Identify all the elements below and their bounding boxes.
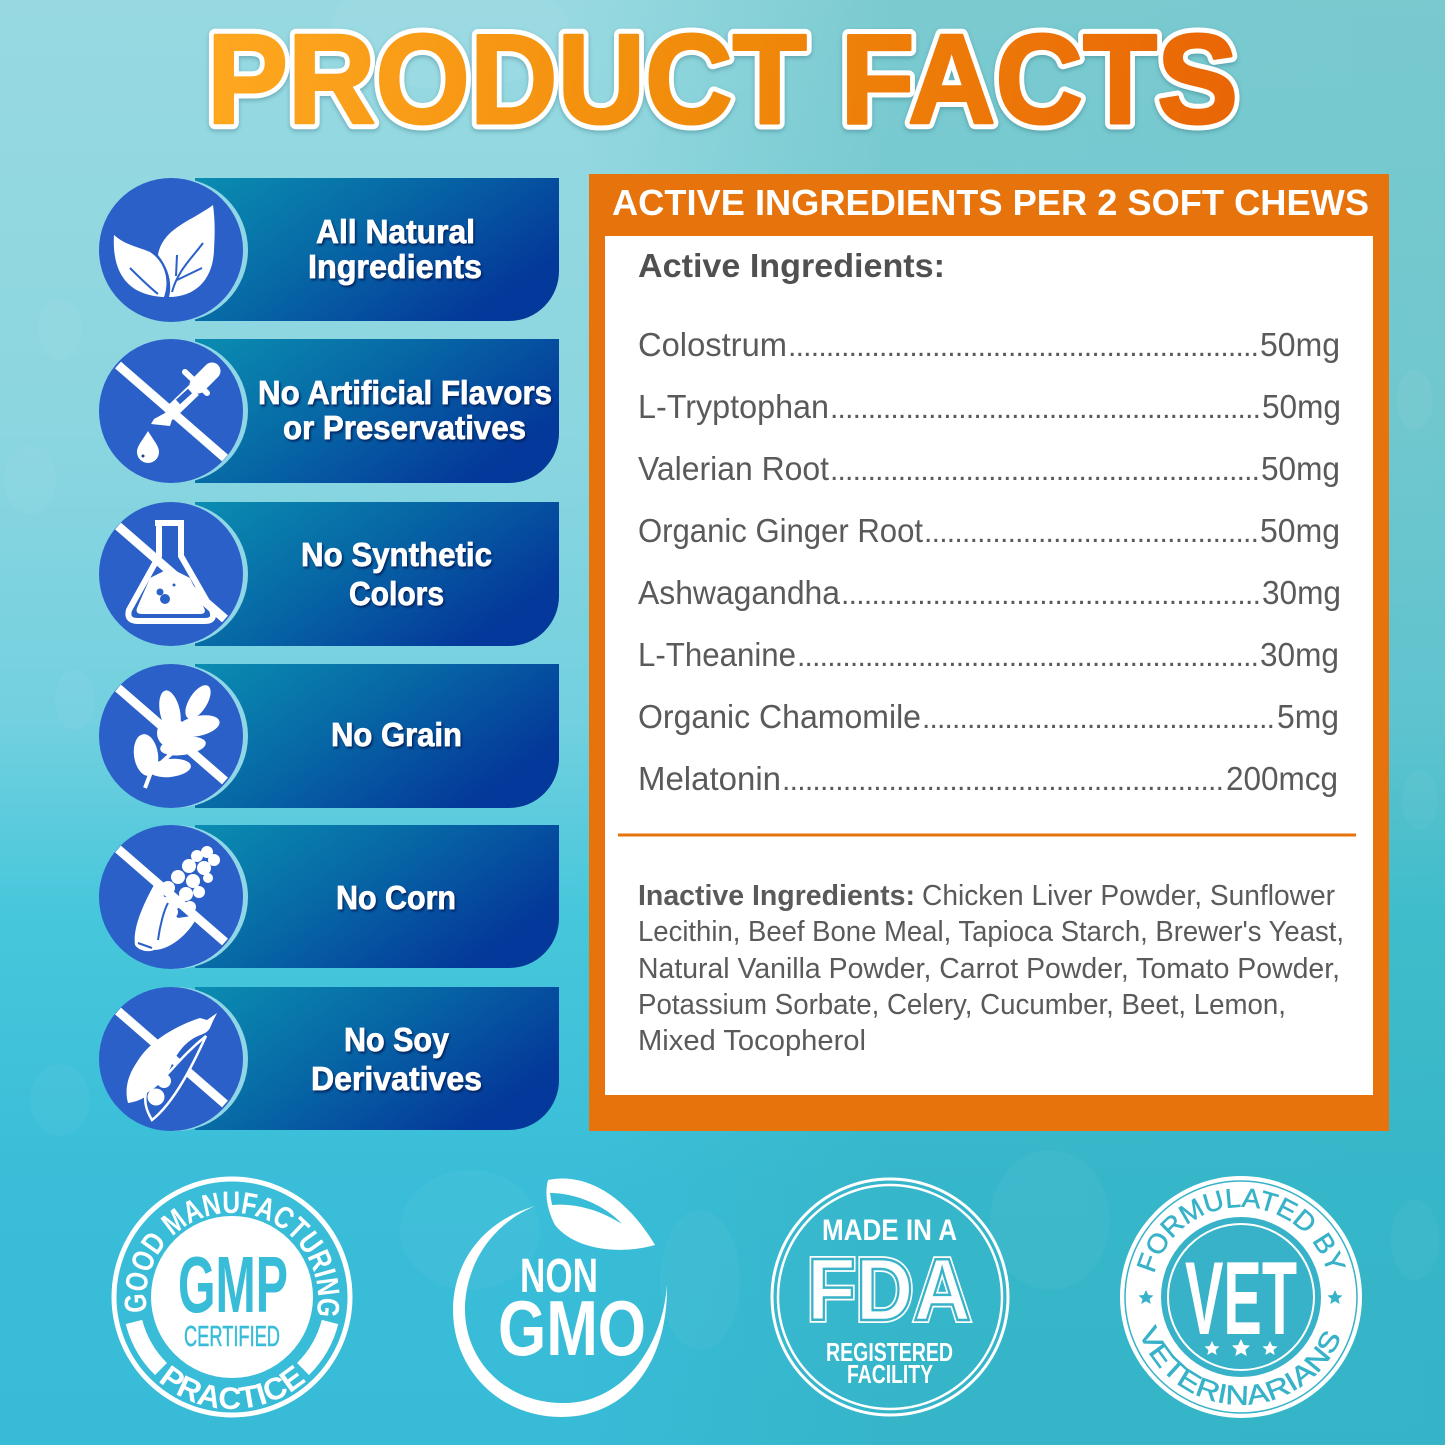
label: All Natural — [316, 213, 475, 250]
label: Derivatives — [311, 1060, 482, 1097]
ingredient: colostrum: .............................................................. — [788, 330, 1259, 363]
label: No Corn — [336, 879, 456, 916]
ingredient: l-theanine: 30mg — [1260, 636, 1339, 673]
ingredient: valerian root: 50mg — [1261, 450, 1340, 487]
label: or Preservatives — [283, 409, 526, 446]
banner: no corn — [99, 825, 559, 969]
icon: leaves — [114, 205, 215, 297]
inactive ingredients text: Natural Vanilla Powder, Carrot Powder, Tomato Powder, — [638, 953, 1340, 985]
panel: active ingredients — [589, 174, 1389, 1131]
ingredient: ashwagandha — [638, 574, 1341, 611]
banner: no soy — [99, 987, 559, 1131]
badge: formulated by veterinarians: VETERINARIANS — [1142, 1324, 1340, 1405]
badge: formulated by veterinarians — [1120, 1176, 1362, 1418]
banner: all natural ingredients — [99, 178, 559, 322]
badge: GMP certified: GMP — [178, 1240, 288, 1329]
badge: GMP certified: PRACTICE — [159, 1364, 306, 1410]
label: No Artificial Flavors — [258, 374, 552, 411]
badge: non GMO: GMO — [498, 1284, 646, 1372]
ingredient: l-theanine: L-Theanine — [638, 636, 796, 673]
ingredient: organic ginger root — [638, 512, 1340, 549]
ingredient: organic chamomile: Organic Chamomile — [638, 698, 921, 735]
badge: FDA registered: REGISTERED — [826, 1337, 953, 1367]
icon: dropper — [118, 365, 225, 463]
ingredient: organic ginger root: 50mg — [1260, 512, 1340, 549]
badge: GMP certified: GOOD MANUFACTURING — [124, 1192, 340, 1316]
ingredient: colostrum — [638, 326, 1340, 363]
inactive ingredients text: Potassium Sorbate, Celery, Cucumber, Beet, Lemon, — [638, 989, 1286, 1021]
icon: grain — [118, 681, 225, 788]
label — [308, 213, 482, 285]
badge: FDA registered: FDA — [807, 1240, 971, 1339]
banner: no grain — [99, 664, 559, 808]
badge: non GMO — [453, 1178, 667, 1417]
ingredient: organic ginger root: ............................................ — [924, 516, 1259, 549]
label — [301, 536, 492, 612]
banner: no artificial flavors — [99, 339, 559, 483]
ingredient: ashwagandha: Ashwagandha — [638, 574, 841, 611]
ingredient: colostrum: 50mg — [1260, 326, 1340, 363]
badge: FDA registered: MADE IN A — [822, 1214, 957, 1247]
badge: formulated by veterinarians: VET — [1185, 1241, 1297, 1357]
badge: formulated by veterinarians: FORMULATED BY — [1136, 1188, 1346, 1272]
ingredient: valerian root: Valerian Root — [638, 450, 829, 487]
ingredient: l-theanine: ............................................................. — [797, 640, 1259, 673]
ingredient: l-tryptophan: 50mg — [1262, 388, 1341, 425]
label — [311, 1021, 482, 1097]
ingredient: l-tryptophan: L-Tryptophan — [638, 388, 829, 425]
ingredient: organic chamomile: 5mg — [1277, 698, 1339, 735]
label: No Grain — [331, 716, 462, 753]
active ingredients heading: Active Ingredients: — [638, 247, 945, 284]
ingredient: melatonin: Melatonin — [638, 760, 781, 797]
label: No Synthetic — [301, 536, 492, 573]
badge: FDA registered — [772, 1179, 1008, 1415]
ingredient: organic ginger root: Organic Ginger Root — [638, 512, 923, 549]
badge: FDA registered: FDA — [807, 1240, 971, 1339]
icon: corn — [118, 846, 225, 951]
ingredient: l-theanine — [638, 636, 1339, 673]
ingredient: ashwagandha: ....................................................... — [841, 578, 1261, 611]
icon: flask — [118, 523, 225, 621]
ingredient: l-tryptophan: ......................................................... — [830, 392, 1261, 425]
ingredient: ashwagandha: 30mg — [1262, 574, 1341, 611]
badge: GMP certified: CERTIFIED — [184, 1321, 280, 1353]
inactive ingredients text — [638, 880, 1344, 1057]
ingredient: valerian root — [638, 450, 1340, 487]
ingredient: l-tryptophan — [638, 388, 1341, 425]
ingredient: melatonin — [638, 760, 1338, 797]
ingredient: organic chamomile: ............................................... — [922, 702, 1275, 735]
badge: non GMO: NON — [520, 1250, 598, 1303]
panel heading: ACTIVE INGREDIENTS PER 2 SOFT CHEWS — [612, 182, 1369, 223]
label: No Soy — [344, 1021, 450, 1058]
title: PRODUCT FACTS — [207, 8, 1238, 150]
inactive ingredients text: Mixed Tocopherol — [638, 1025, 866, 1057]
label: Ingredients — [308, 248, 482, 285]
ingredient: valerian root: ......................................................... — [830, 454, 1260, 487]
inactive ingredients text: Lecithin, Beef Bone Meal, Tapioca Starch, Brewer's Yeast, — [638, 916, 1344, 948]
inactive ingredients text: Chicken Liver Powder, Sunflower — [922, 880, 1335, 912]
ingredient: colostrum: Colostrum — [638, 326, 787, 363]
badge: FDA registered: FACILITY — [847, 1359, 933, 1389]
title: PRODUCT FACTS — [207, 8, 1238, 150]
ingredient: organic chamomile — [638, 698, 1339, 735]
badge: GMP certified — [112, 1176, 352, 1418]
ingredient: melatonin: 200mcg — [1226, 760, 1338, 797]
label: Colors — [349, 575, 444, 612]
label — [258, 374, 552, 446]
ingredient: melatonin: .......................................................... — [782, 764, 1224, 797]
icon: soy pod — [118, 1011, 225, 1120]
banner: no synthetic colors — [99, 502, 559, 646]
inactive ingredients text: Inactive Ingredients: — [638, 880, 915, 912]
